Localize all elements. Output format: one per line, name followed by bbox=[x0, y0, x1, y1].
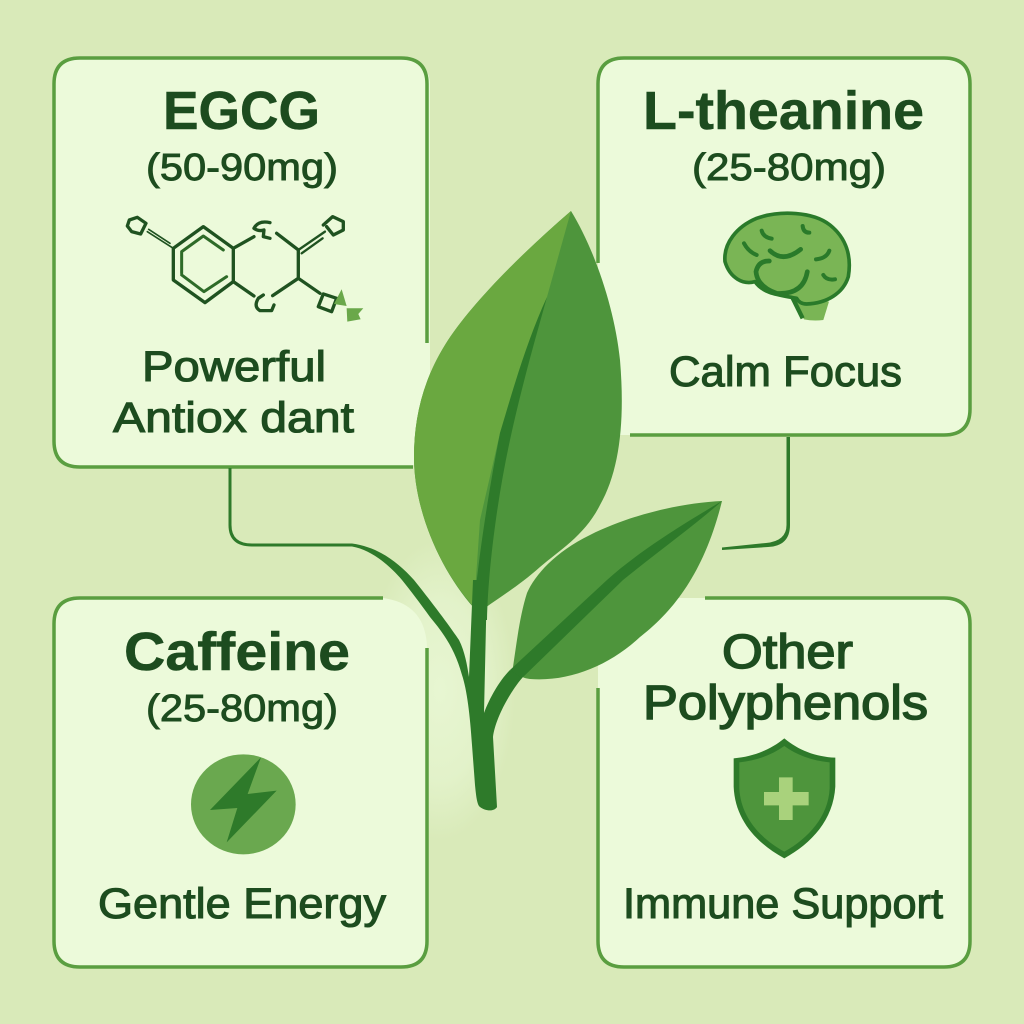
connector: EGCG to stem bbox=[230, 468, 352, 545]
panel box: L-theanine bbox=[598, 58, 970, 435]
label: Calm Focus: Calm Focus bbox=[669, 348, 902, 396]
panel: Caffeine bbox=[54, 598, 427, 967]
label: Powerful Antioxidant: Powerful bbox=[142, 343, 326, 391]
small leaf bbox=[510, 501, 722, 680]
panel: L-theanine bbox=[598, 58, 970, 435]
dose: 50-90mg: (50-90mg) bbox=[146, 147, 338, 189]
stem glow bbox=[365, 540, 515, 840]
label: Gentle Energy: Gentle Energy bbox=[98, 880, 387, 928]
icon: shield bbox=[734, 738, 835, 858]
label: Immune Support: Immune Support bbox=[623, 880, 943, 928]
panel: Other Polyphenols bbox=[598, 598, 970, 967]
dose: 25-80mg: (25-80mg) bbox=[692, 147, 886, 189]
plant illustration bbox=[352, 211, 722, 810]
panel: EGCG bbox=[54, 58, 430, 467]
large leaf bbox=[414, 211, 622, 620]
connector: L-theanine to small leaf bbox=[722, 437, 790, 550]
heading: L-theanine: L-theanine bbox=[643, 81, 924, 141]
icon: lightning bolt bbox=[191, 754, 296, 854]
heading: Other Polyphenols: Polyphenols bbox=[643, 677, 928, 730]
label: Powerful Antioxidant bbox=[113, 343, 354, 442]
heading: Caffeine: Caffeine bbox=[124, 622, 350, 682]
stem bbox=[352, 544, 522, 810]
icon: brain bbox=[725, 213, 849, 321]
panel box: Other Polyphenols bbox=[598, 598, 970, 967]
panel box: EGCG bbox=[54, 58, 430, 467]
heading: Other Polyphenols: Other bbox=[722, 626, 853, 679]
panel box: Caffeine bbox=[54, 598, 427, 967]
icon: molecule bbox=[127, 217, 363, 322]
dose: 25-80mg: (25-80mg) bbox=[146, 688, 338, 730]
heading: EGCG: EGCG bbox=[163, 81, 320, 141]
label: Powerful Antioxidant: Antiox dant bbox=[113, 394, 354, 442]
heading: Other Polyphenols bbox=[643, 626, 928, 730]
